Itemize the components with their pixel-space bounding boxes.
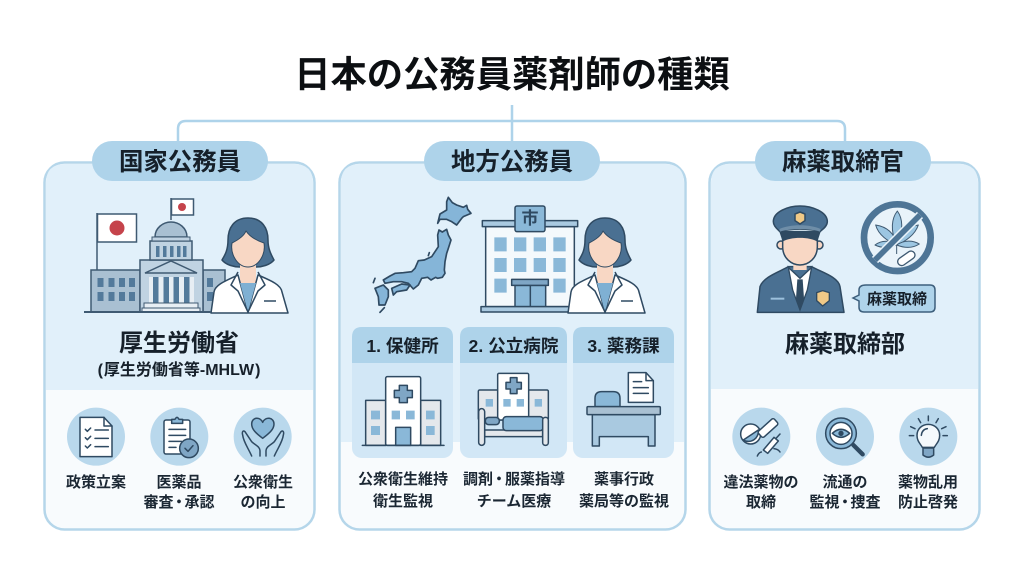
text: health center duties: 公衆衛生維持 — [358, 470, 448, 488]
heading pill: national — [92, 141, 268, 181]
heading: ministry: 厚生労働省 — [119, 330, 239, 357]
text: hospital duties: 調剤・服薬指導 — [463, 470, 565, 488]
icon group: narcotics duties — [732, 408, 957, 466]
text: distribution monitoring — [809, 474, 881, 511]
callout: narcotics control — [853, 285, 935, 312]
panel: national — [44, 141, 314, 530]
text: illegal drug control — [723, 473, 799, 511]
card: health center — [352, 327, 453, 458]
text: distribution monitoring: 流通の — [822, 474, 868, 491]
text: public health: 公衆衛生 — [233, 473, 293, 491]
panel: narcotics — [710, 141, 980, 530]
icon: desk and document — [587, 373, 660, 446]
text: policy: 政策立案 — [66, 473, 126, 491]
card: health center: 1. 保健所 — [366, 336, 439, 356]
text: hospital duties — [463, 470, 565, 510]
heading: department: 麻薬取締部 — [785, 331, 905, 358]
text: hospital duties: チーム医療 — [477, 493, 551, 510]
icon: policy document — [67, 408, 125, 466]
connector lines — [178, 105, 845, 141]
callout: narcotics control: 麻薬取締 — [867, 291, 927, 308]
text: illegal drug control: 違法薬物の — [723, 473, 799, 491]
text: health center duties — [358, 470, 448, 510]
text: abuse prevention — [898, 473, 958, 511]
icon: magnifier eye — [816, 408, 874, 466]
text: affairs duties: 薬局等の監視 — [579, 492, 669, 510]
text: illegal drug control: 取締 — [746, 494, 776, 511]
text: review: 審査・承認 — [143, 493, 215, 511]
text: review — [143, 474, 215, 511]
icon: heart and hands — [234, 408, 292, 466]
icon: no drugs sign — [864, 204, 931, 271]
icon: small flag — [171, 198, 194, 220]
icon: clinic building — [362, 377, 444, 445]
text: ministry subtitle: (厚生労働省等-MHLW) — [98, 360, 260, 379]
title: 日本の公務員薬剤師の種類 — [294, 54, 730, 95]
heading pill: narcotics: 麻薬取締官 — [782, 149, 904, 176]
text: abuse prevention: 薬物乱用 — [898, 473, 958, 491]
icon: light bulb — [899, 408, 957, 466]
card: pharmaceutical affairs: 3. 薬務課 — [587, 336, 660, 356]
text: distribution monitoring: 監視・捜査 — [809, 493, 881, 511]
card: pharmaceutical affairs — [573, 327, 674, 458]
heading pill: national: 国家公務員 — [119, 149, 241, 176]
card: public hospital — [460, 327, 567, 458]
illustration: pharmacist — [568, 218, 645, 313]
text: public health: の向上 — [240, 494, 286, 511]
text: affairs duties — [579, 470, 669, 510]
panel: local — [340, 141, 686, 530]
text: health center duties: 衛生監視 — [373, 492, 433, 510]
icon group: national duties — [67, 408, 292, 466]
text: public health — [233, 473, 293, 511]
illustration: city hall — [481, 206, 578, 312]
card: public hospital: 2. 公立病院 — [469, 336, 559, 356]
heading pill: local: 地方公務員 — [451, 149, 573, 176]
heading pill: narcotics — [755, 141, 931, 181]
text: review: 医薬品 — [156, 474, 202, 491]
text: affairs duties: 薬事行政 — [594, 470, 654, 488]
icon: hospital bed — [478, 373, 548, 445]
illustration: pharmacist — [211, 218, 288, 313]
illustration: Japan map — [373, 197, 471, 312]
heading pill: local — [424, 141, 600, 181]
text: city sign: 市 — [522, 208, 538, 228]
illustration: parliament building — [84, 222, 225, 312]
icon: clipboard review — [150, 408, 208, 466]
icon: pills and dropper — [732, 408, 790, 466]
icon: large flag — [97, 213, 136, 270]
illustration: officer — [757, 206, 844, 312]
text: abuse prevention: 防止啓発 — [898, 493, 958, 511]
